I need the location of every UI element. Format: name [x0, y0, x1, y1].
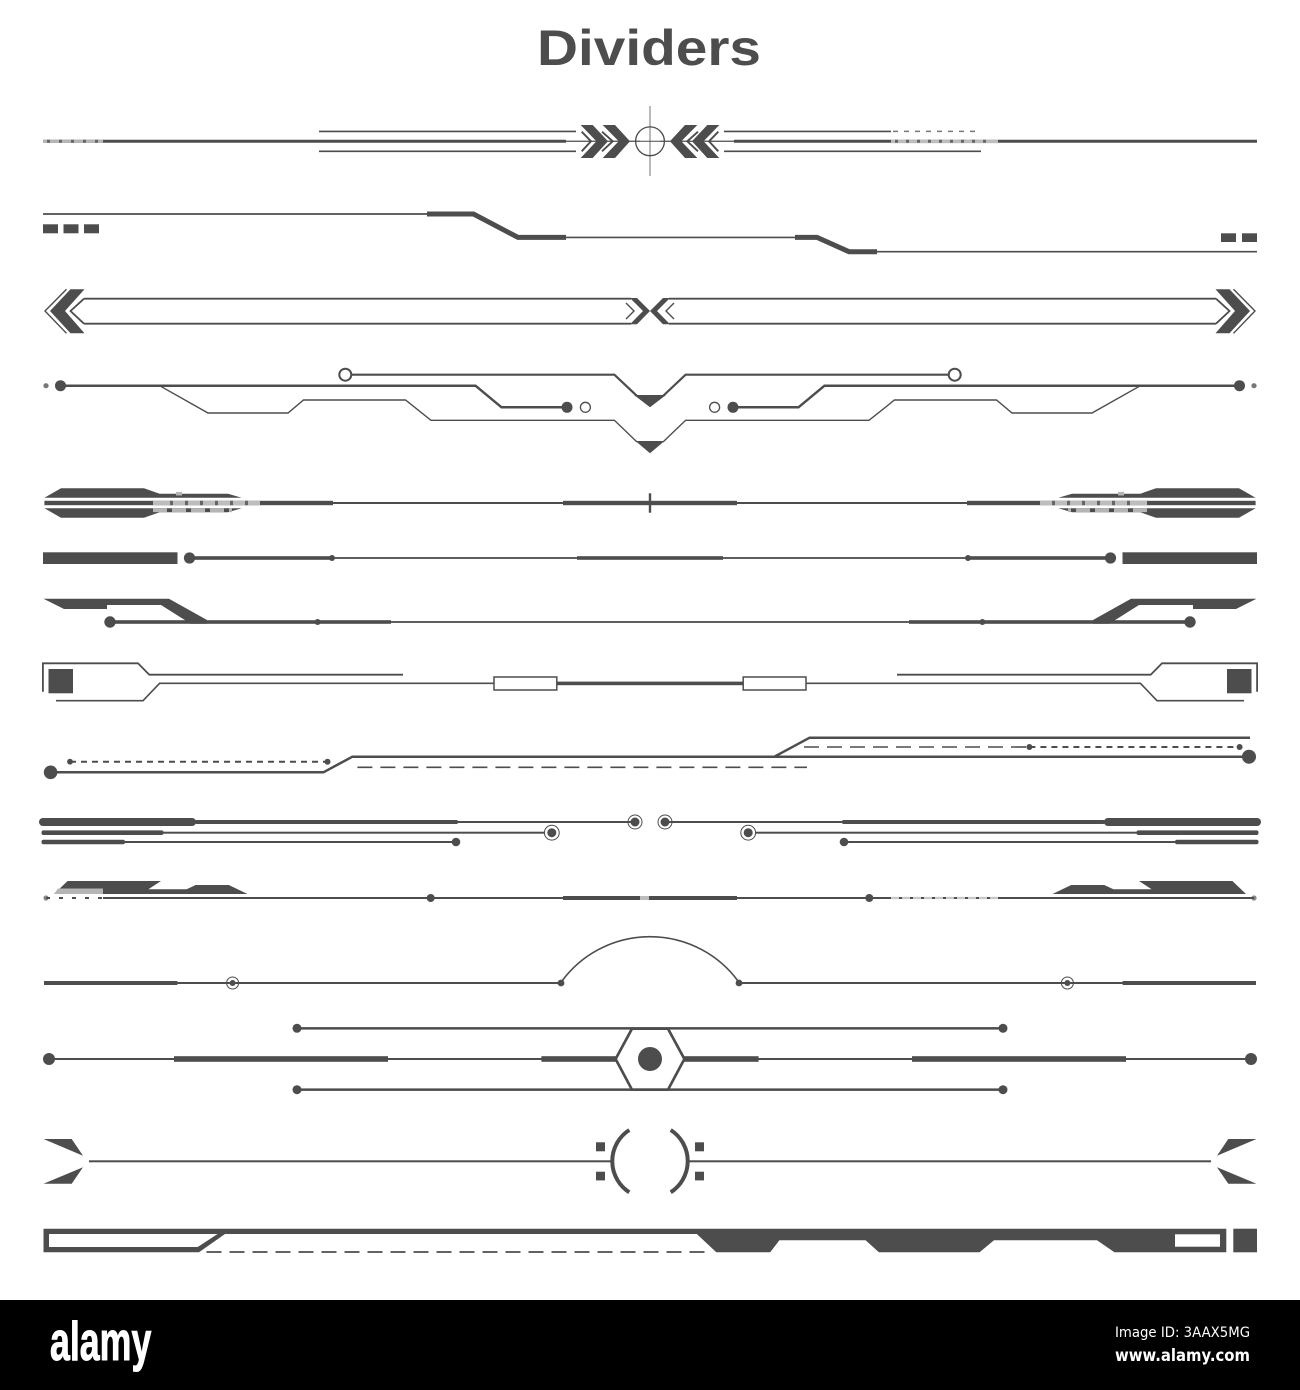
website: www.alamy.com — [1115, 1346, 1250, 1366]
right squares — [1221, 233, 1257, 242]
hexagon — [616, 1029, 684, 1090]
inset window — [1175, 1234, 1220, 1247]
main trace — [60, 386, 567, 407]
left half — [43, 125, 640, 158]
end block — [1233, 1229, 1257, 1252]
divider 8: bracket with square and rectangles — [43, 663, 1257, 701]
footer logo: alamy — [50, 1310, 152, 1372]
dashed centre — [357, 766, 807, 768]
triangles — [634, 395, 666, 453]
title: Dividers — [537, 19, 761, 76]
dotted left — [70, 761, 328, 763]
divider 6: solid bars and dotted line — [43, 552, 1257, 564]
centre chevron — [630, 298, 650, 324]
hexagon centre dot — [638, 1047, 662, 1071]
main trace — [51, 757, 1249, 772]
left squares — [43, 224, 99, 233]
watermark ghost strips — [50, 888, 998, 900]
stepped path — [43, 214, 1257, 252]
divider 14: parentheses and arrow tips — [44, 1130, 1256, 1192]
divider 1: crosshair with chevrons — [43, 106, 1257, 176]
image id: Image ID: 3AAX5MG — [1115, 1325, 1250, 1341]
dashes — [206, 1251, 705, 1253]
divider 3: long arrow frames — [45, 289, 1255, 333]
divider 9: stepped trace with dashes — [44, 738, 1256, 779]
divider 12: arc with target dots — [44, 937, 1256, 989]
lower thin trace — [160, 386, 637, 442]
divider 15: heavy panel bar — [44, 1229, 1257, 1252]
crosshair — [566, 106, 734, 176]
divider 13: hexagon with rails — [43, 1024, 1257, 1094]
divider 10: three tapered lines with targets — [39, 815, 1261, 846]
upper branch — [774, 738, 1250, 757]
divider 11: base line with angular shapes — [43, 881, 1257, 902]
watermark ghost strips — [43, 130, 998, 143]
outer thin chevron — [45, 289, 66, 333]
divider 7: angled wings — [44, 599, 1256, 628]
divider 4: circuit traces with triangles — [43, 369, 1257, 453]
upper trace — [351, 375, 637, 396]
outer dark chevron — [50, 289, 84, 333]
divider 5: double-ended bars with cross tick — [44, 488, 1256, 518]
frame — [70, 299, 631, 324]
arc — [562, 937, 738, 981]
end dots — [43, 383, 49, 388]
frame and dark notched bar — [44, 1229, 1226, 1252]
footer bar — [0, 1300, 1300, 1390]
dashed right — [804, 746, 1029, 748]
divider 2: stepped line with squares — [43, 214, 1257, 252]
